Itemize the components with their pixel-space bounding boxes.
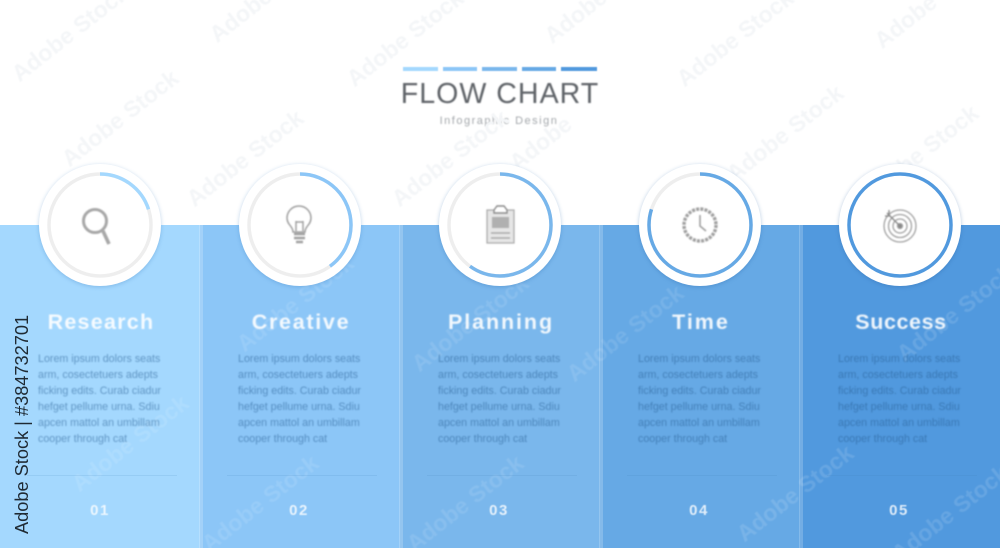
body text: planning: ficking edits. Curab ciadur	[438, 385, 561, 397]
body text: research	[38, 353, 161, 445]
body text: success: hefget pellume urna. Sdiu	[838, 401, 960, 413]
body text: time: Lorem ipsum dolors seats	[638, 353, 760, 365]
body text: time: cooper through cat	[638, 433, 727, 445]
circle badge: creative	[236, 162, 364, 288]
body text: success: apcen mattol an umbillam	[838, 417, 960, 429]
body text: creative: Lorem ipsum dolors seats	[238, 353, 360, 365]
body text: success: Lorem ipsum dolors seats	[838, 353, 960, 365]
body text: research: apcen mattol an umbillam	[38, 417, 160, 429]
body text: planning: Lorem ipsum dolors seats	[438, 353, 560, 365]
body text: success: arm, cosectetuers adepts	[838, 369, 958, 381]
body text: research: ficking edits. Curab ciadur	[38, 385, 161, 397]
body text: success: cooper through cat	[838, 433, 927, 445]
body text: research: cooper through cat	[38, 433, 127, 445]
body text: time	[638, 353, 761, 445]
body text: creative: apcen mattol an umbillam	[238, 417, 360, 429]
watermarks: Adobe Stock	[407, 270, 533, 377]
panel: creative background	[200, 225, 400, 548]
number: 05: 05	[889, 502, 909, 519]
body text: time: apcen mattol an umbillam	[638, 417, 760, 429]
watermarks: Adobe Stock	[562, 280, 688, 387]
stock id vertical label: Adobe Stock | #384732701	[12, 315, 32, 534]
title: FLOW CHART	[401, 78, 599, 110]
watermarks: Adobe Stock	[387, 105, 513, 212]
body text: success: ficking edits. Curab ciadur	[838, 385, 961, 397]
body text: creative: arm, cosectetuers adepts	[238, 369, 358, 381]
subtitle: Infographic Design	[440, 115, 558, 127]
watermarks: Adobe Stock	[732, 440, 858, 547]
body text: time: hefget pellume urna. Sdiu	[638, 401, 760, 413]
body text: success	[838, 353, 961, 445]
body text: planning	[438, 353, 561, 445]
watermarks: Adobe Stock	[232, 250, 358, 357]
heading: planning: Planning	[448, 310, 554, 334]
watermarks: Adobe	[504, 111, 577, 175]
watermarks: Adobe Stock	[722, 80, 848, 187]
panel: time background	[600, 225, 800, 548]
panel: research background	[0, 225, 200, 548]
body text: creative	[238, 353, 361, 445]
body text: creative: ficking edits. Curab ciadur	[238, 385, 361, 397]
heading: creative: Creative	[252, 310, 350, 334]
body text: research: hefget pellume urna. Sdiu	[38, 401, 160, 413]
title bars	[402, 66, 598, 72]
body text: planning: arm, cosectetuers adepts	[438, 369, 558, 381]
body text: planning: hefget pellume urna. Sdiu	[438, 401, 560, 413]
circle badge: research	[36, 162, 164, 288]
number: 04: 04	[689, 502, 709, 519]
body text: time: ficking edits. Curab ciadur	[638, 385, 761, 397]
body text: planning: apcen mattol an umbillam	[438, 417, 560, 429]
body text: research: Lorem ipsum dolors seats	[38, 353, 160, 365]
number: 02: 02	[289, 502, 309, 519]
body text: planning: cooper through cat	[438, 433, 527, 445]
panel: planning background	[400, 225, 600, 548]
watermarks: Adobe Stock	[857, 100, 983, 207]
watermarks: Adobe Stock	[57, 65, 183, 172]
watermarks: Adobe Stock	[182, 105, 308, 212]
heading: success: Success	[855, 310, 947, 334]
circle badge: success	[836, 162, 964, 288]
heading: time: Time	[672, 310, 730, 334]
heading: research: Research	[48, 310, 154, 334]
number: 03: 03	[489, 502, 509, 519]
body text: creative: hefget pellume urna. Sdiu	[238, 401, 360, 413]
circle badge: planning	[436, 162, 564, 288]
panel: success background	[800, 225, 1000, 548]
body text: time: arm, cosectetuers adepts	[638, 369, 758, 381]
watermarks: Adobe Stock	[67, 390, 193, 497]
circle badge: time	[636, 162, 764, 288]
number: 01: 01	[90, 502, 110, 519]
body text: research: arm, cosectetuers adepts	[38, 369, 158, 381]
body text: creative: cooper through cat	[238, 433, 327, 445]
